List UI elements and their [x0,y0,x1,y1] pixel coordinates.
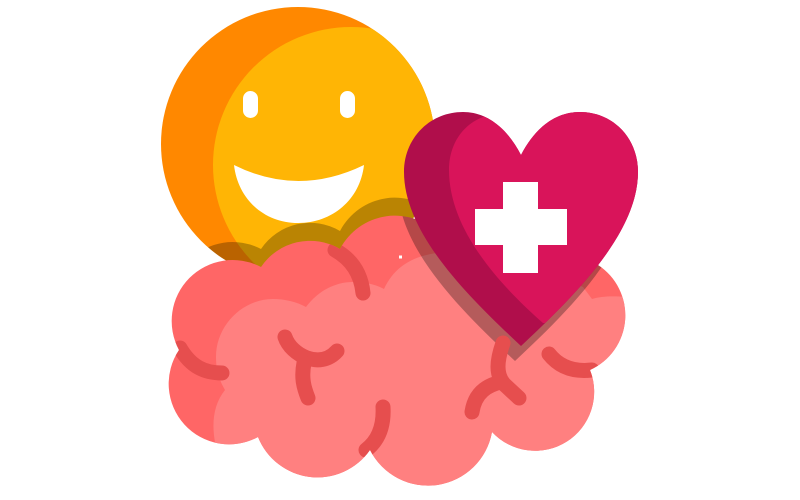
brain [168,216,626,486]
illustration: mental health [161,7,638,486]
brain lighter lobes [214,254,626,486]
smiling mouth [234,165,364,223]
right eye [340,91,355,118]
brain shadow on face [208,198,414,267]
white cross [475,182,567,273]
face base: orange circle [161,7,435,281]
heart with medical cross [404,100,650,346]
brain grooves [180,250,592,450]
brain base: darker coral lobes [169,216,625,486]
heart base: dark crimson [404,112,638,346]
smiley face [161,7,433,267]
face highlight: yellow disc [213,27,433,267]
heart shadow on brain [402,216,602,361]
left eye [243,91,258,118]
white speck [399,256,402,258]
heart highlight: bright crimson [449,112,638,323]
